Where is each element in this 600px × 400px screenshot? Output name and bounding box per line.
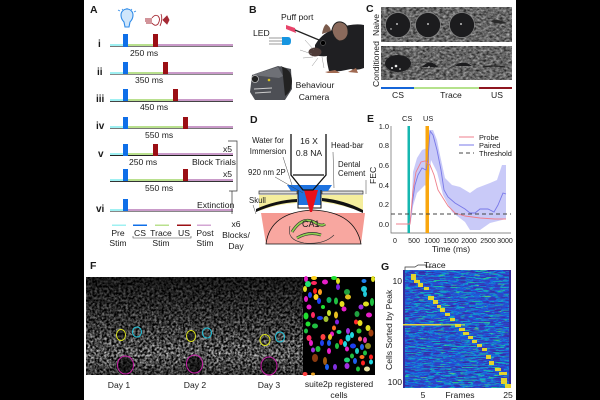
block trials label: Block Trials [192, 157, 236, 167]
panel F: registered imaging [86, 260, 375, 400]
legend: Pre [111, 228, 125, 238]
row iv label: iv [96, 121, 105, 132]
x5 labels: x5 [223, 144, 232, 154]
x tick labels: 2500 [480, 238, 496, 245]
stimulus labels: CS [392, 90, 404, 100]
paired trace [396, 131, 506, 224]
dental cement label [338, 160, 366, 178]
naive label: Naive [371, 14, 381, 36]
objective label [296, 136, 322, 158]
legend: Threshold [479, 149, 512, 158]
behaviour camera label: Behaviour [296, 80, 334, 90]
legend: Stim [109, 238, 127, 248]
legend: CS [134, 228, 146, 238]
heading D: D [250, 114, 258, 126]
icon: air puff to eye [145, 14, 169, 26]
LED label: LED [253, 28, 270, 38]
stimulus labels: US [491, 90, 503, 100]
panel B: behaviour rig [249, 4, 364, 102]
heatmap [403, 270, 511, 388]
dental cement label: Dental [338, 160, 361, 169]
row v label: v [98, 149, 104, 160]
water immersion [287, 185, 332, 205]
y tick labels: 10 [392, 276, 402, 286]
row i labels: i [98, 39, 101, 50]
mouse [300, 22, 364, 73]
y tick labels: 0.8 [379, 141, 389, 150]
day labels: Day 2 [184, 380, 206, 390]
objective [291, 134, 326, 190]
legend: Stim [196, 238, 214, 248]
duration 250 ms: 250 ms [130, 48, 158, 58]
objective label: 16 X [300, 136, 318, 146]
dental cement [259, 195, 363, 212]
panel C: eye images [366, 3, 512, 100]
extinction label: Extinction [197, 200, 234, 210]
conditioned eye frames [381, 46, 512, 80]
x tick labels: 3000 [497, 238, 513, 245]
legend: Post [196, 228, 214, 238]
suite2p registered cells [302, 276, 375, 376]
row vi label: vi [96, 204, 105, 215]
day labels: Day 3 [258, 380, 280, 390]
y tick labels: 0.0 [379, 220, 389, 229]
two-photon label: 920 nm 2P [248, 168, 286, 177]
row ii timeline [110, 62, 233, 75]
x tick labels: Frames [445, 390, 475, 400]
heading C: C [366, 3, 374, 15]
puff port label: Puff port [281, 12, 314, 22]
row ii label: ii [97, 67, 103, 78]
threshold [391, 213, 511, 215]
icon: LED [269, 37, 291, 45]
legend: Stim [152, 238, 170, 248]
behaviour camera label: Camera [299, 92, 329, 102]
CS bar [408, 126, 410, 233]
row iv timeline [110, 117, 233, 129]
y axis title: Cells Sorted by Peak [384, 289, 394, 370]
water label: Immersion [250, 147, 286, 156]
block bracket [228, 141, 237, 214]
panel D: surgical preparation [248, 114, 366, 244]
day labels [108, 380, 280, 390]
legend: Trace [150, 228, 172, 238]
x tick labels: 0 [393, 238, 397, 245]
camera [250, 66, 292, 100]
row iii label: iii [96, 94, 105, 105]
axes [391, 126, 511, 233]
behaviour camera label [296, 80, 334, 102]
x tick labels [393, 238, 513, 245]
day 1 image [86, 277, 158, 375]
duration 350 ms: 350 ms [135, 75, 163, 85]
icon: LED bulb [118, 8, 136, 27]
x6 blocks per day label [222, 219, 250, 251]
suite2p caption: suite2p registered [305, 379, 373, 389]
suite2p caption: cells [330, 390, 348, 400]
CS label: CS [402, 114, 412, 123]
panel E: FEC line chart [367, 113, 513, 254]
x tick labels: 1000 [424, 238, 440, 245]
duration 550 ms: 550 ms [145, 183, 173, 193]
heading F: F [90, 260, 97, 272]
row v first timeline [110, 144, 233, 156]
water label [250, 136, 286, 156]
y tick labels: 0.6 [379, 161, 389, 170]
puff port tube [286, 25, 319, 40]
leader lines [253, 152, 366, 214]
trace label: Trace [424, 260, 446, 270]
suite2p caption [305, 379, 373, 400]
naive eye frames [381, 7, 512, 42]
y tick labels [379, 122, 389, 229]
imaging well [298, 190, 321, 208]
day 3 image [230, 277, 303, 375]
CA1 label: CA1 [302, 219, 320, 229]
heading A: A [90, 4, 98, 16]
trace bracket [405, 265, 432, 270]
paired confidence band [411, 130, 506, 230]
conditioned label: Conditioned [371, 41, 381, 87]
x tick labels [421, 390, 513, 400]
dental cement label: Cement [338, 169, 366, 178]
heading E: E [367, 113, 374, 125]
legend [459, 133, 512, 158]
legend: Paired [479, 141, 500, 150]
US bar [426, 126, 429, 233]
row i timeline [110, 34, 233, 47]
x tick labels: 25 [503, 390, 513, 400]
heading B: B [249, 4, 257, 16]
duration 250 ms: 250 ms [129, 157, 157, 167]
panel A: trial protocols [90, 4, 250, 251]
page background [84, 0, 516, 400]
x tick labels: 5 [421, 390, 426, 400]
stimulus bar [381, 87, 512, 89]
head-bar [259, 191, 363, 194]
x axis title: Time (ms) [432, 244, 470, 254]
stimulus labels: Trace [440, 90, 462, 100]
x6 blocks per day label: x6 [231, 219, 241, 229]
y tick labels: 100 [388, 377, 402, 387]
row v second timeline [110, 169, 233, 182]
day 2 image [158, 277, 230, 375]
probe trace [396, 161, 506, 224]
US label: US [423, 114, 433, 123]
brain dome [266, 210, 361, 244]
legend: Probe [479, 133, 499, 142]
duration 450 ms: 450 ms [140, 102, 168, 112]
laser cone [304, 190, 318, 212]
panel G: heatmap [381, 260, 513, 400]
duration 550 ms: 550 ms [145, 130, 173, 140]
day labels: Day 1 [108, 380, 130, 390]
hippocampus CA1 [289, 220, 334, 243]
x5 labels [223, 144, 232, 179]
x5 labels: x5 [223, 169, 232, 179]
x6 blocks per day label: Day [228, 241, 244, 251]
row vi timeline [110, 199, 233, 212]
objective label: 0.8 NA [296, 148, 322, 158]
x tick labels: 500 [408, 238, 420, 245]
heading G: G [381, 261, 389, 273]
y axis title: FEC [368, 167, 378, 184]
x tick labels: 2000 [461, 238, 477, 245]
skull label: Skull [249, 196, 266, 205]
x tick labels: 1500 [443, 238, 459, 245]
x6 blocks per day label: Blocks/ [222, 230, 250, 240]
brain tissue [261, 213, 365, 244]
stimulus labels [392, 90, 503, 100]
head-bar label: Head-bar [331, 141, 364, 150]
legend [109, 224, 214, 248]
y tick labels: 1.0 [379, 122, 389, 131]
y tick labels: 0.4 [379, 181, 389, 190]
y tick labels: 0.2 [379, 200, 389, 209]
skull [256, 198, 363, 213]
legend: US [178, 228, 190, 238]
water label: Water for [252, 136, 284, 145]
row iii timeline [110, 89, 233, 102]
y tick labels [388, 276, 402, 387]
